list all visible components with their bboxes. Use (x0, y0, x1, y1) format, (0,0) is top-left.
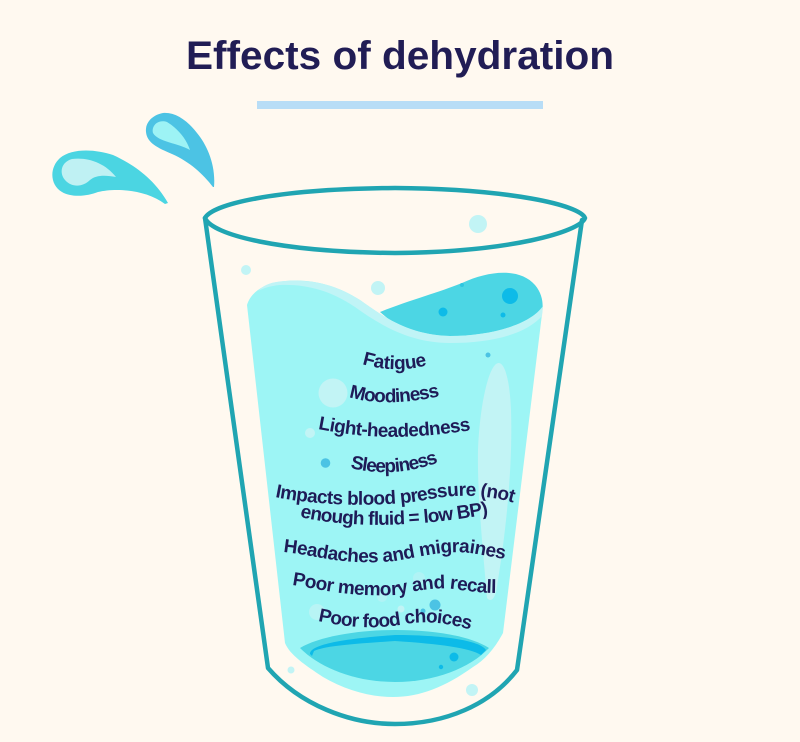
tall glass reflection (478, 363, 511, 600)
effect: moodiness: Moodiness (350, 384, 439, 402)
effect: poor food choices: Poor food choices (319, 608, 472, 629)
bubbles (241, 215, 518, 696)
icon: left water droplet (52, 150, 168, 204)
title underline bar (257, 101, 543, 109)
effect: fatigue: Fatigue (363, 352, 426, 374)
list of dehydration effects (276, 352, 516, 629)
water body in the glass (247, 273, 543, 697)
water surface highlight (258, 281, 543, 343)
effect: light-headedness: Light-headedness (319, 416, 470, 437)
water bottom pool (300, 630, 489, 682)
effect: impacts blood pressure, line 2: enough fluid = low BP) (301, 501, 488, 528)
icon: upper water droplet (146, 113, 214, 187)
title: Effects of dehydration (186, 34, 614, 78)
effect: impacts blood pressure, line 1: Impacts blood pressure (not (276, 483, 516, 507)
glass outline (205, 188, 585, 724)
effect: headaches and migraines: Headaches and migraines (284, 539, 505, 562)
front water (247, 280, 543, 697)
back water surface (380, 273, 543, 350)
pool bright rim (310, 635, 486, 656)
effect: sleepiness: Sleepiness (351, 454, 437, 476)
effect: poor memory and recall: Poor memory and recall (293, 572, 496, 598)
